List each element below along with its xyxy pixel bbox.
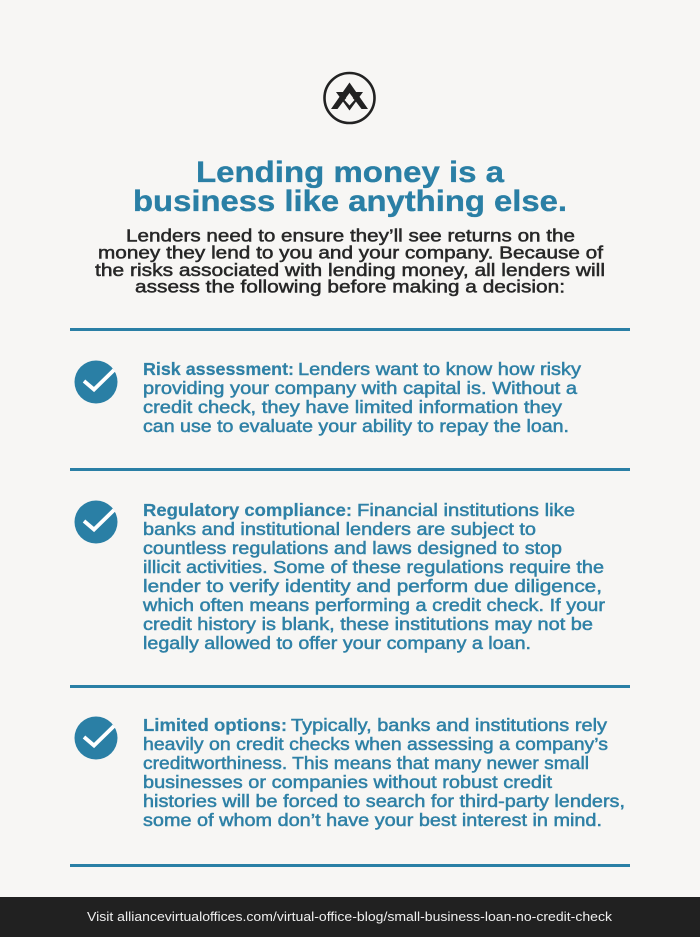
panel: regulatory compliance (74, 500, 605, 653)
limited options text: heavily on credit checks when assessing a company’s (143, 734, 608, 754)
icon: logo (324, 73, 374, 123)
panel: limited options (74, 715, 625, 830)
title: Lending money is a (196, 156, 505, 189)
risk assessment text: Lenders want to know how risky (298, 359, 581, 379)
icon: check (74, 716, 118, 760)
risk assessment text: providing your company with capital is. Without a (143, 378, 577, 398)
intro text (95, 226, 605, 296)
regulatory compliance text (142, 500, 605, 653)
limited options text: histories will be forced to search for third-party lenders, (143, 791, 625, 811)
footer bar: Visit alliancevirtualoffices.com/virtual-office-blog/small-business-loan-no-credit-check (87, 909, 613, 924)
risk assessment text (143, 359, 581, 436)
intro text: money they lend to you and your company. Because of (98, 242, 603, 262)
regulatory compliance text: credit history is blank, these institutions may not be (143, 614, 593, 634)
regulatory compliance text: lender to verify identity and perform due diligence, (143, 576, 602, 596)
regulatory compliance text: Regulatory compliance: (143, 500, 352, 520)
regulatory compliance text: countless regulations and laws designed to stop (143, 538, 562, 558)
limited options text: creditworthiness. This means that many newer small (143, 753, 589, 773)
risk assessment text: can use to evaluate your ability to repay the loan. (143, 416, 569, 436)
title: business like anything else. (133, 185, 567, 218)
regulatory compliance text: Financial institutions like (357, 500, 575, 520)
icon: check (74, 360, 118, 404)
title (133, 156, 567, 218)
limited options text (143, 715, 625, 830)
intro text: assess the following before making a decision: (135, 276, 565, 296)
icon: check (74, 500, 118, 544)
limited options text: some of whom don’t have your best interest in mind. (143, 810, 602, 830)
regulatory compliance text: which often means performing a credit check. If your (142, 595, 605, 615)
footer bar (0, 897, 700, 937)
limited options text: Limited options: (143, 715, 287, 735)
panel: risk assessment (74, 359, 581, 436)
limited options text: Typically, banks and institutions rely (291, 715, 607, 735)
regulatory compliance text: banks and institutional lenders are subject to (143, 519, 536, 539)
regulatory compliance text: legally allowed to offer your company a loan. (143, 633, 531, 653)
risk assessment text: credit check, they have limited information they (143, 397, 562, 417)
limited options text: businesses or companies without robust credit (143, 772, 552, 792)
regulatory compliance text: illicit activities. Some of these regulations require the (143, 557, 604, 577)
intro text: the risks associated with lending money, all lenders will (95, 260, 605, 280)
risk assessment text: Risk assessment: (143, 359, 294, 379)
intro text: Lenders need to ensure they’ll see returns on the (126, 226, 575, 246)
